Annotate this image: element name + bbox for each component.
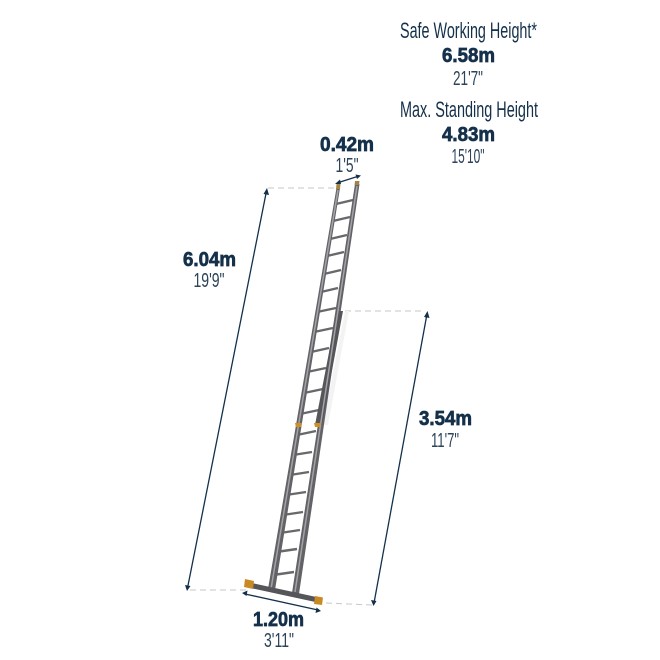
safe working height block: 21'7"	[453, 68, 483, 90]
closed length arrow with guide lines	[326, 311, 430, 606]
max standing height block: 4.83m	[442, 124, 495, 146]
closed length label: 3.54m	[419, 408, 472, 430]
base width arrow	[242, 590, 321, 613]
base width label: 3'11"	[264, 630, 294, 652]
second section rail	[315, 311, 343, 425]
max standing height block	[400, 97, 538, 168]
max standing height block: Max. Standing Height	[400, 97, 538, 122]
full length label: 6.04m	[183, 249, 236, 271]
orange guide brackets	[295, 423, 321, 427]
full length label	[183, 249, 236, 292]
rungs	[273, 200, 353, 575]
full length label: 19'9"	[194, 270, 224, 292]
max standing height block: 15'10"	[452, 146, 484, 168]
width label: 1'5"	[336, 155, 358, 177]
left rail	[268, 188, 340, 590]
base width label: 1.20m	[253, 609, 304, 631]
stabiliser bar	[246, 582, 321, 603]
safe working height block: 6.58m	[442, 45, 495, 67]
closed length label: 11'7"	[431, 430, 459, 452]
base width label	[253, 609, 304, 652]
stabiliser end caps	[244, 579, 323, 605]
safe working height block	[400, 18, 537, 90]
full length arrow with guide lines	[185, 188, 335, 591]
lower rail highlights	[271, 186, 357, 592]
width arrow	[335, 174, 361, 184]
width label: 0.42m	[320, 134, 374, 156]
ladder	[244, 181, 360, 605]
ladder shadow	[323, 311, 349, 425]
closed length label	[419, 408, 472, 452]
top caps	[336, 181, 360, 189]
safe working height block: Safe Working Height*	[400, 18, 537, 43]
width label	[320, 134, 374, 177]
right rail	[292, 184, 360, 594]
